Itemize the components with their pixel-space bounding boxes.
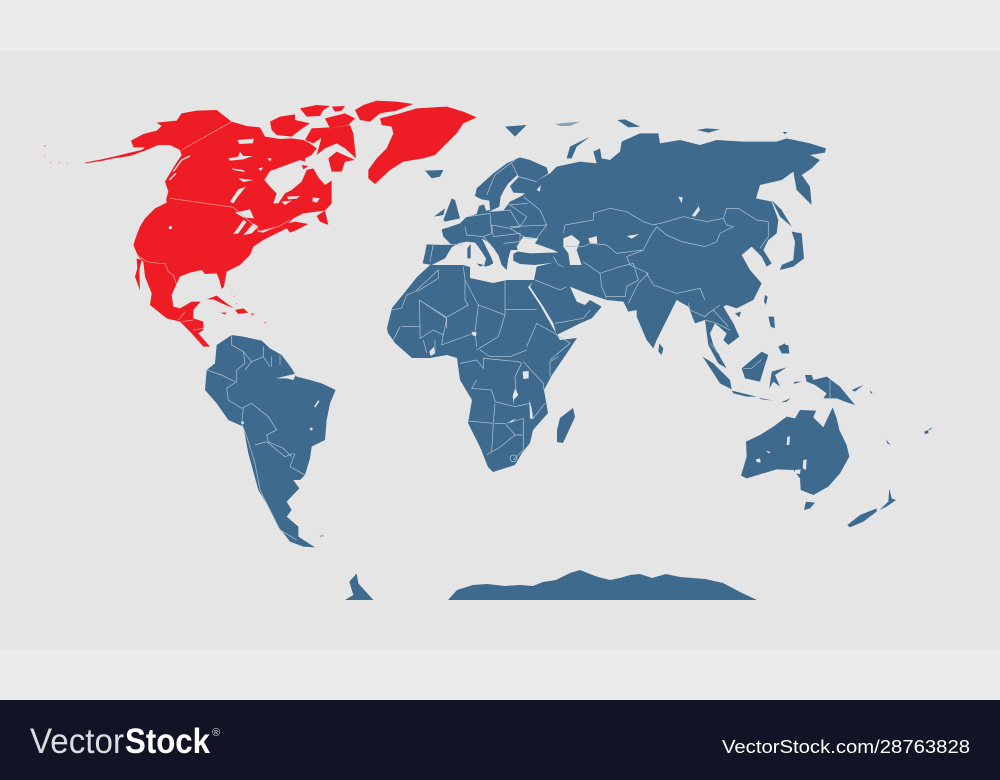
footer bar: [0, 700, 1000, 780]
panel: map background: [0, 51, 1000, 650]
logo word: Stock: Stock: [125, 722, 210, 761]
Sumatra: [703, 357, 732, 389]
Falkland Islands: [319, 535, 324, 537]
Arctic islands: [270, 101, 413, 172]
Java and lesser islands: [732, 382, 863, 403]
Amazon and lakes: [241, 373, 319, 430]
coastal fjord slits: [165, 156, 190, 203]
African inland lakes: [429, 332, 533, 422]
inland seas: [489, 175, 700, 265]
footer logo: [30, 722, 220, 761]
Arctic islands: [555, 119, 787, 158]
Greenland: [368, 107, 477, 184]
Africa borders: north: [392, 267, 570, 360]
Newfoundland: [317, 211, 328, 225]
Africa borders: south: [460, 357, 558, 462]
map: Africa: [387, 265, 577, 472]
lakes and inlets: [169, 139, 320, 235]
Pacific islands: [870, 390, 933, 445]
map: Antarctica: [448, 570, 757, 600]
Antarctic Peninsula: [345, 573, 373, 600]
Madagascar: [557, 408, 575, 443]
map: South America: [205, 335, 373, 600]
Eurasian borders: [430, 160, 768, 330]
Caribbean islands: [207, 296, 255, 315]
island borders: [710, 343, 830, 399]
New Zealand: [847, 488, 896, 527]
African mainland: [387, 265, 577, 472]
small Pacific and Atlantic islets: [44, 145, 266, 324]
South American mainland: [205, 335, 336, 547]
New Guinea: [805, 375, 855, 405]
logo word: Vector: Vector: [30, 722, 124, 761]
registered mark: ®: [212, 727, 220, 739]
Australia: [741, 407, 849, 495]
Baja California: [135, 258, 142, 291]
map: Oceania and Southeast Asian islands: [703, 343, 933, 527]
Australian lakes: [756, 437, 807, 474]
Borneo: [742, 352, 768, 382]
map: North America highlighted in red: [44, 101, 477, 347]
Mindanao: [782, 345, 789, 353]
European islands: [425, 125, 527, 267]
Eurasian mainland: [423, 133, 826, 368]
South American borders: [207, 335, 305, 540]
North American mainland: [85, 110, 332, 347]
map: Eurasia: [423, 119, 826, 368]
Sulawesi: [769, 367, 787, 388]
East Asian islands: [658, 200, 804, 355]
Tasmania: [804, 502, 815, 510]
country borders: [138, 122, 290, 330]
footer image id: VectorStock.com/28763828: [722, 737, 970, 757]
